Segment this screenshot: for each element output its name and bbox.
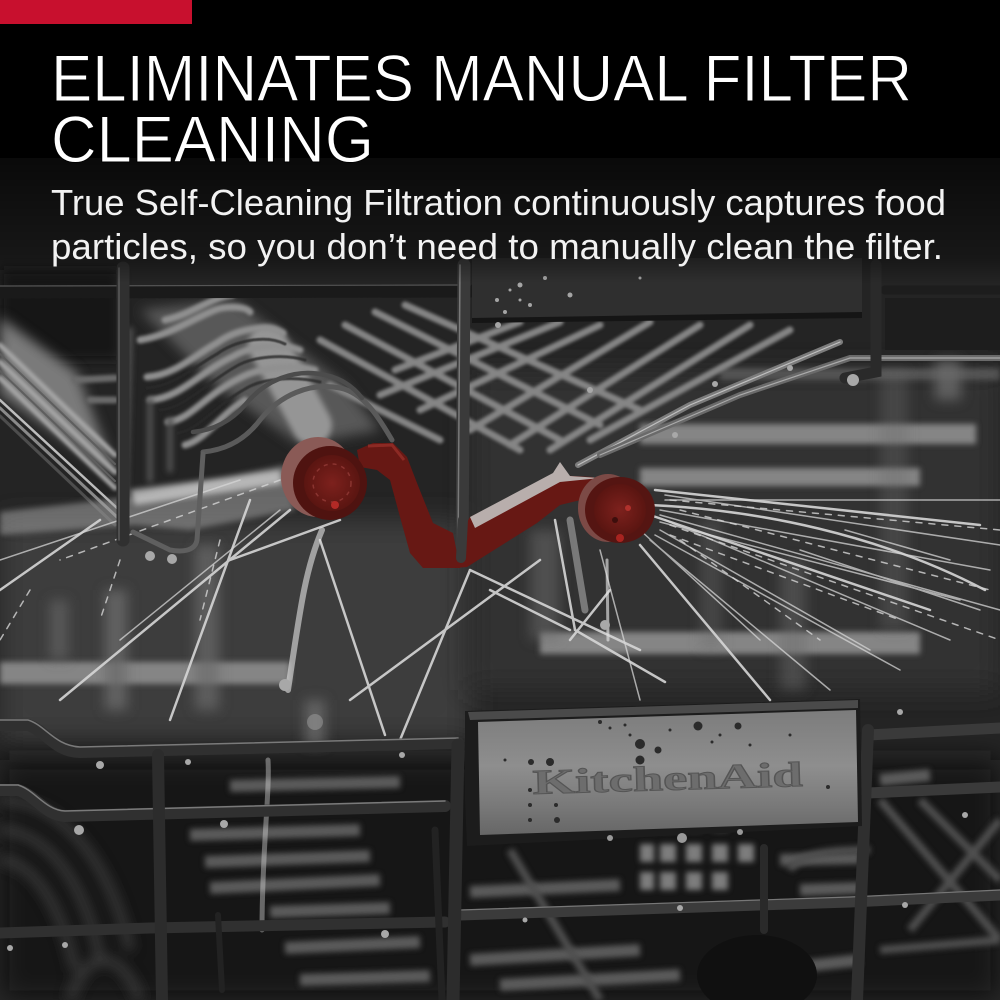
red spray arm <box>281 437 655 568</box>
upper rack handle <box>472 258 1000 350</box>
KitchenAid handle <box>465 699 862 846</box>
arm right section <box>455 475 593 568</box>
body text: True Self-Cleaning Filtration continuously captures food <box>51 182 946 223</box>
upper rack dark wires <box>0 265 1000 560</box>
left tine bundle <box>0 317 117 477</box>
red accent bar <box>0 0 192 24</box>
top fade under header <box>0 158 1000 283</box>
left cap <box>281 437 367 520</box>
header band <box>0 0 1000 158</box>
blurred lower rack bars <box>190 775 930 985</box>
title: CLEANING <box>51 102 374 176</box>
upper rack metal wires <box>133 342 1000 551</box>
dark hub at bottom <box>697 935 817 1000</box>
upper rack lattice tines <box>320 305 790 450</box>
water sheet left of arm <box>0 465 295 535</box>
curved basket band and ribs <box>0 295 380 525</box>
arm left section <box>357 443 460 568</box>
body text: particles, so you don’t need to manually clean the filter. <box>51 226 943 267</box>
lower rack wires <box>0 720 1000 1000</box>
title: ELIMINATES MANUAL FILTER <box>51 41 912 115</box>
brand name: KitchenAid <box>532 755 804 802</box>
body text <box>51 182 946 267</box>
basket arch wires <box>133 373 392 551</box>
water droplets <box>7 365 968 951</box>
right cap <box>578 474 655 543</box>
water spray jets <box>0 480 1000 930</box>
title <box>51 41 912 176</box>
blurred checker blocks <box>640 815 754 890</box>
